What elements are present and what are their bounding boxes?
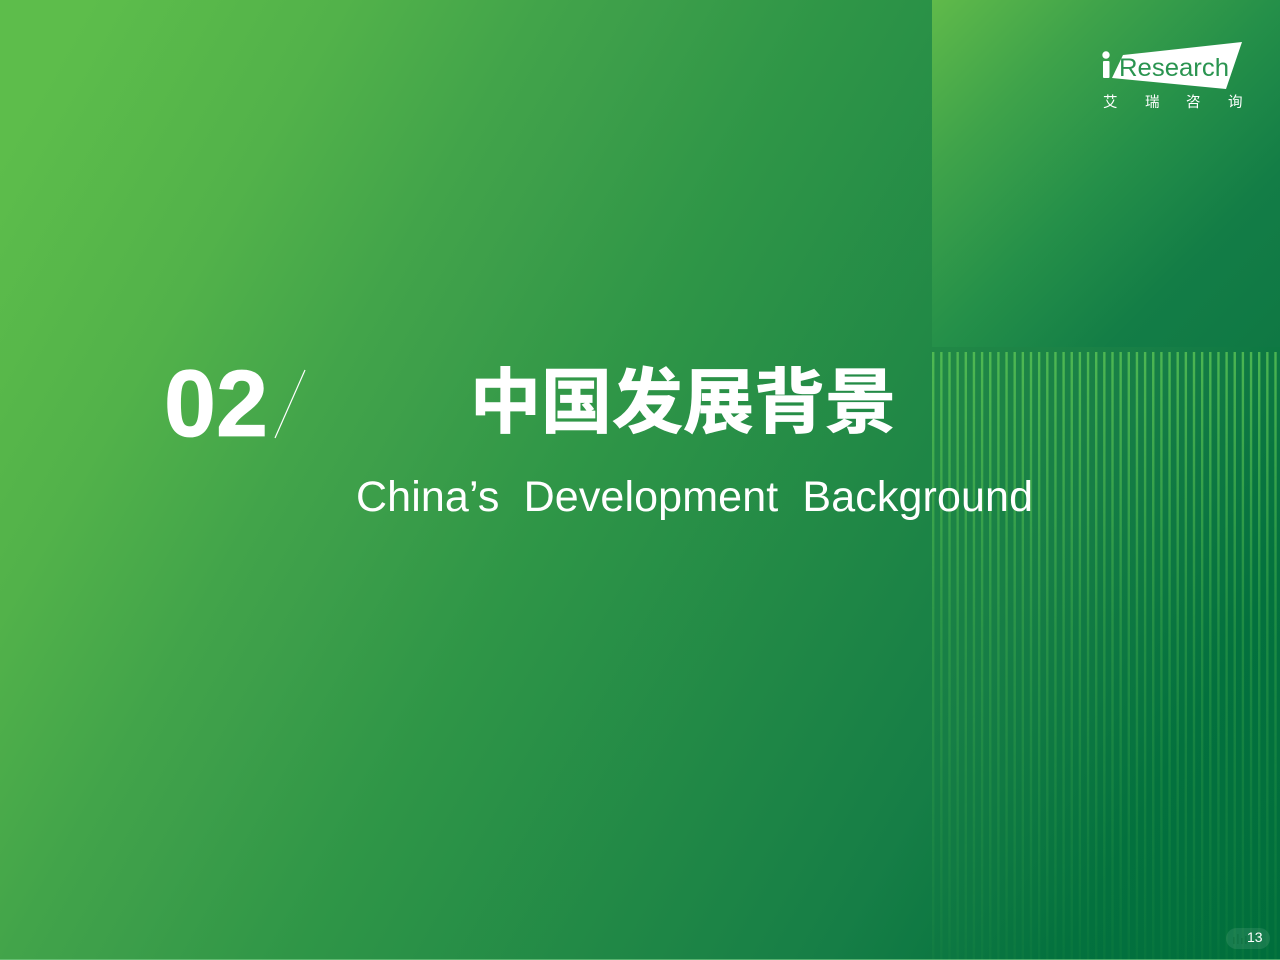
- logo chinese name: 询: [1228, 94, 1242, 111]
- logo chinese name: 艾: [1103, 94, 1118, 111]
- logo chinese name: 咨: [1186, 94, 1200, 111]
- corner panel: [932, 0, 1280, 347]
- section number: 02: [164, 351, 268, 457]
- page number: 13: [1247, 929, 1263, 945]
- logo: iResearch: [1102, 42, 1242, 111]
- chinese title: 中国发展背景: [470, 364, 896, 443]
- vertical stripe pattern: [932, 352, 1280, 960]
- logo chinese name: 瑞: [1145, 94, 1160, 111]
- badge pill: [1226, 928, 1270, 949]
- logo banner: [1112, 42, 1242, 89]
- page number badge: [1226, 928, 1270, 949]
- logo wordmark: Research: [1119, 54, 1229, 82]
- english subtitle: China’s Development Background: [356, 473, 1033, 521]
- logo i: [1102, 51, 1110, 78]
- slash divider: [275, 370, 305, 438]
- badge bars icon: [1233, 934, 1247, 944]
- logo chinese name: [1103, 94, 1242, 111]
